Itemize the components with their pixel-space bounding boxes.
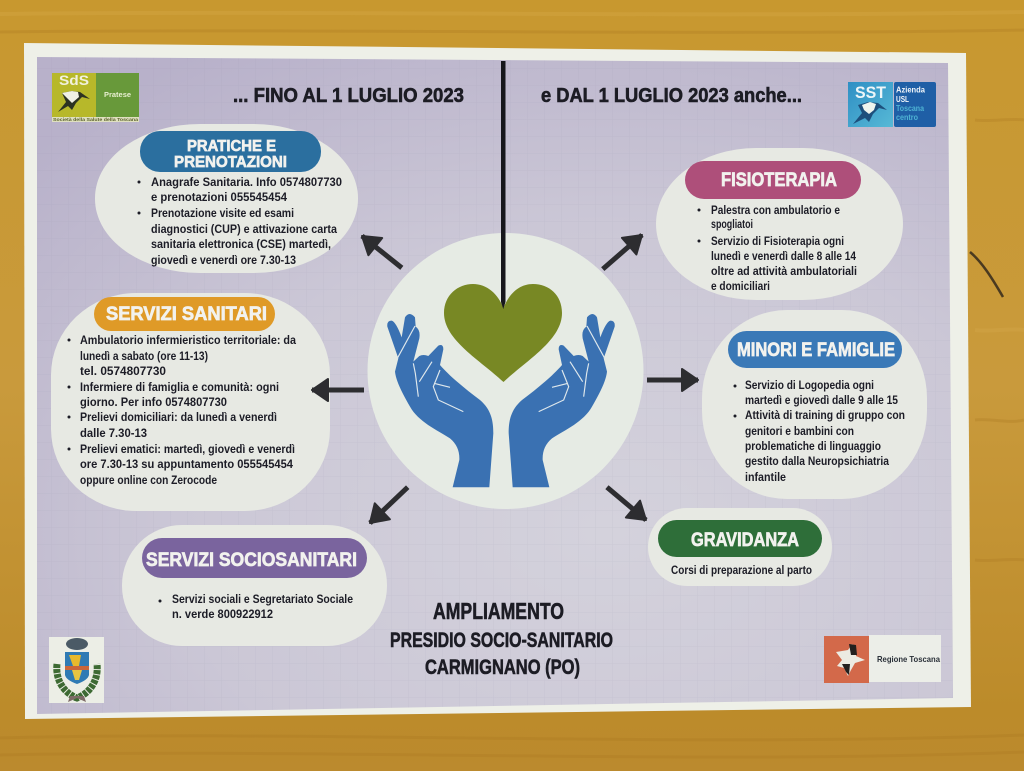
bullet list: Servizi Sanitari: Prelievi domiciliari: da lunedì a venerdì [80, 410, 277, 424]
panel: Pratiche e Prenotazioni [95, 124, 358, 273]
logo: SST Azienda USL Toscana centro [848, 82, 936, 127]
arrow: right to Minori e Famiglie [647, 369, 698, 391]
title block: Ampliamento Presidio Socio-Sanitario Carmignano [390, 598, 613, 679]
bullet list: Servizi Sociosanitari [158, 592, 353, 621]
icon: hands holding heart [387, 284, 615, 487]
arrow: down-right to Gravidanza [600, 479, 653, 528]
bullet list: Servizi Sanitari: dalle 7.30-13 [80, 426, 147, 440]
logo: Regione Toscana [824, 635, 941, 683]
panel: Minori e Famiglie [702, 310, 927, 499]
bullet list: Servizi Sanitari: Prelievi ematici: martedì, giovedì e venerdì [80, 442, 295, 456]
bullet list: Pratiche: diagnostici (CUP) e attivazione carta [151, 222, 337, 236]
bullet list: Minori e Famiglie: martedì e giovedì dalle 9 alle 15 [745, 393, 898, 407]
logo: Regione Toscana: Regione Toscana [877, 654, 940, 664]
bullet list: Minori e Famiglie: Servizio di Logopedia ogni [745, 378, 874, 392]
panel: central circle [368, 233, 644, 509]
bullet list: Minori e Famiglie [734, 378, 905, 484]
arrow: down-left to Servizi Sociosanitari [362, 479, 415, 531]
heading pill: Servizi Sanitari: SERVIZI SANITARI [106, 304, 267, 325]
bullet list: Servizi Sociosanitari: Servizi sociali e Segretariato Sociale [172, 592, 353, 606]
logo: SdS Pratese: Pratese [104, 92, 131, 99]
arrow: left to Servizi Sanitari [312, 379, 364, 401]
bullet list: Fisioterapia: e domiciliari [711, 279, 770, 293]
heading pill: Gravidanza [658, 520, 822, 557]
heading pill: Pratiche e Prenotazioni [140, 131, 321, 172]
panel: Gravidanza [648, 508, 832, 586]
arrow: up-left to Pratiche [355, 227, 409, 276]
bullet list: Servizi Sanitari: tel. 0574807730 [80, 364, 166, 378]
bullet list: Fisioterapia [698, 203, 857, 293]
bullet list: Minori e Famiglie: problematiche di linguaggio [745, 439, 881, 453]
bullet list: Pratiche: giovedì e venerdì ore 7.30-13 [151, 253, 296, 267]
bullet list: Pratiche [138, 175, 342, 267]
heading pill: Fisioterapia [685, 161, 861, 199]
bullet list: Servizi Sociosanitari: n. verde 800922912 [172, 607, 273, 621]
logo: SST Azienda USL Toscana centro: Toscana [896, 103, 924, 113]
lilac grid background [37, 57, 953, 714]
bullet list: Servizi Sanitari [68, 333, 296, 487]
title block: Ampliamento Presidio Socio-Sanitario Carmignano: PRESIDIO SOCIO-SANITARIO [390, 629, 613, 652]
bullet list: Pratiche: Anagrafe Sanitaria. Info 0574807730 [151, 175, 342, 189]
heading pill: Pratiche e Prenotazioni: PRENOTAZIONI [174, 154, 287, 171]
central vertical divider line [501, 61, 506, 309]
bullet list: Fisioterapia: Servizio di Fisioterapia ogni [711, 234, 844, 248]
bullet list: Minori e Famiglie: genitori e bambini con [745, 424, 854, 438]
bullet list: Minori e Famiglie: gestito dalla Neuropsichiatria [745, 454, 889, 468]
heading pill: Minori e Famiglie [728, 331, 902, 368]
bullet list: Servizi Sanitari: giorno. Per info 0574807730 [80, 395, 227, 409]
title block: Ampliamento Presidio Socio-Sanitario Carmignano: AMPLIAMENTO [433, 598, 564, 624]
logo: SdS Pratese: SdS [59, 72, 89, 88]
bullet list: Fisioterapia: Palestra con ambulatorio e [711, 203, 840, 217]
heading pill: Servizi Sociosanitari: SERVIZI SOCIOSANITARI [146, 550, 357, 571]
bullet list: Servizi Sanitari: ore 7.30-13 su appuntamento 055545454 [80, 457, 293, 471]
icon: right hand [509, 314, 615, 487]
bullet list: Fisioterapia: spogliatoi [711, 217, 753, 231]
heading pill: Servizi Sociosanitari [142, 538, 367, 578]
logo: SST Azienda USL Toscana centro: centro [896, 112, 918, 122]
panel: Fisioterapia [656, 148, 903, 300]
logo: SST Azienda USL Toscana centro: USL [896, 94, 909, 104]
bullet list: Servizi Sanitari: lunedì a sabato (ore 11-13) [80, 349, 208, 363]
heading pill: Fisioterapia: FISIOTERAPIA [721, 170, 837, 191]
bullet list: Pratiche: sanitaria elettronica (CSE) martedì, [151, 237, 331, 251]
text: Corsi di preparazione al parto: Corsi di preparazione al parto [671, 563, 812, 577]
logo: SdS Pratese [52, 72, 139, 122]
title block: Ampliamento Presidio Socio-Sanitario Carmignano: CARMIGNANO (PO) [425, 656, 580, 679]
logo: SST Azienda USL Toscana centro: SST [855, 83, 887, 102]
bullet list: Servizi Sanitari: Ambulatorio infermieristico territoriale: da [80, 333, 296, 347]
logo: Comune di Carmignano coat of arms [49, 637, 104, 703]
heading pill: Gravidanza: GRAVIDANZA [691, 530, 799, 551]
heading: until 1 July 2023: ... FINO AL 1 LUGLIO 2023 [233, 85, 464, 107]
bullet list: Servizi Sanitari: oppure online con Zerocode [80, 473, 217, 487]
panel: Servizi Sanitari [51, 293, 330, 511]
arrow: up-right to Fisioterapia [596, 227, 649, 277]
heading pill: Servizi Sanitari [94, 297, 275, 331]
bullet list: Fisioterapia: oltre ad attività ambulatoriali [711, 264, 857, 278]
bullet list: Pratiche: Prenotazione visite ed esami [151, 206, 294, 220]
bullet list: Fisioterapia: lunedì e venerdì dalle 8 alle 14 [711, 249, 856, 263]
bullet list: Minori e Famiglie: infantile [745, 470, 786, 484]
bullet list: Servizi Sanitari: Infermiere di famiglia e comunità: ogni [80, 380, 279, 394]
logo: SdS Pratese: Società della Salute della Toscana [53, 117, 139, 122]
heading: from 1 July 2023 also: e DAL 1 LUGLIO 2023 anche... [541, 85, 802, 107]
icon: green heart [444, 284, 562, 382]
heading pill: Minori e Famiglie: MINORI E FAMIGLIE [737, 340, 895, 361]
bullet list: Minori e Famiglie: Attività di training di gruppo con [745, 408, 905, 422]
bullet list: Pratiche: e prenotazioni 055545454 [151, 190, 287, 204]
logo: SST Azienda USL Toscana centro: Azienda [896, 84, 925, 94]
panel: Servizi Sociosanitari [122, 525, 387, 646]
heading pill: Pratiche e Prenotazioni: PRATICHE E [187, 138, 276, 155]
icon: left hand [387, 314, 493, 487]
